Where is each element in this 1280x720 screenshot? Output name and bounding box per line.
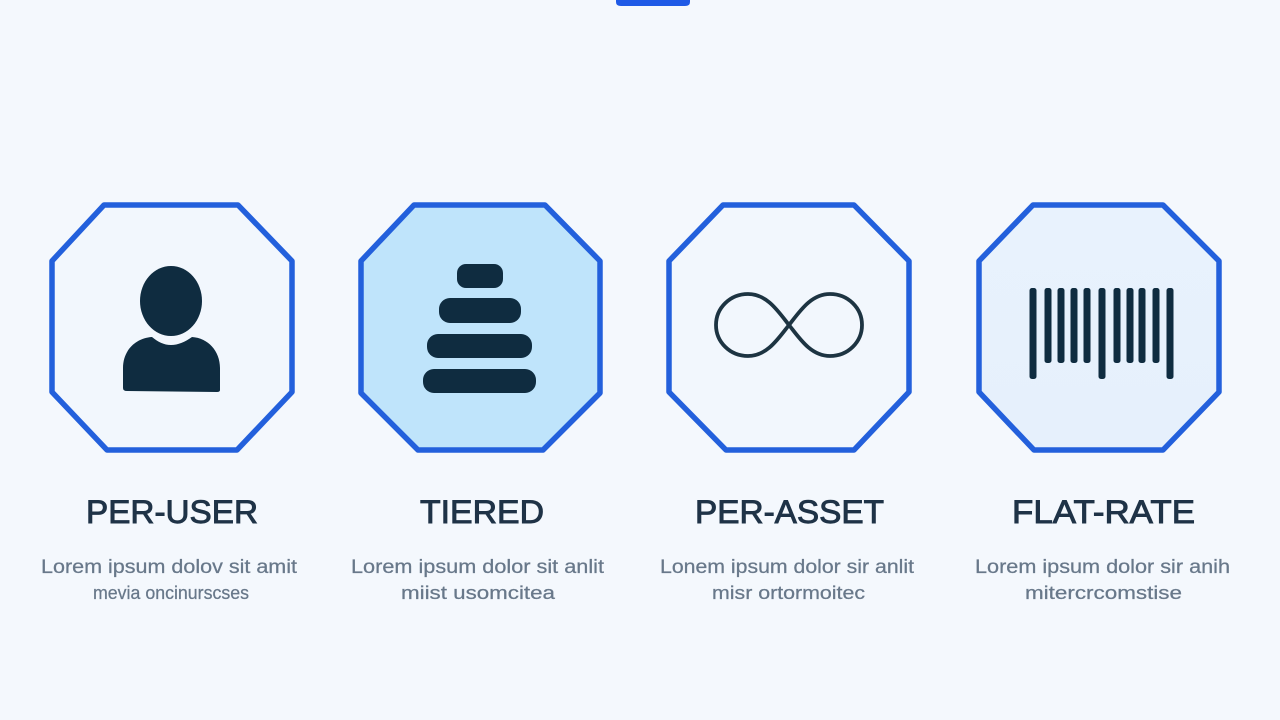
panel: tiered xyxy=(351,205,605,603)
icon: barcode xyxy=(1030,288,1174,379)
description: tiered: Lorem ipsum dolor sit anlit xyxy=(351,557,605,578)
octagon: tiered xyxy=(361,205,600,450)
heading: per-user: PER-USER xyxy=(86,494,258,530)
octagon: per-user xyxy=(52,205,292,450)
description: per-asset: misr ortormoitec xyxy=(712,582,865,603)
top accent bar xyxy=(616,0,690,6)
octagon: flat-rate xyxy=(979,205,1219,450)
description: tiered xyxy=(351,557,605,603)
octagon: per-asset xyxy=(669,205,909,450)
description: flat-rate: mitercrcomstise xyxy=(1025,582,1182,603)
heading: tiered: TIERED xyxy=(420,494,544,530)
description: flat-rate: Lorem ipsum dolor sir anih xyxy=(975,557,1230,578)
panel: flat-rate xyxy=(975,205,1230,603)
description: per-user: mevia oncinurscses xyxy=(93,582,249,603)
description: per-user: Lorem ipsum dolov sit amit xyxy=(41,557,298,578)
icon: person xyxy=(123,266,220,392)
heading: flat-rate: FLAT-RATE xyxy=(1012,494,1195,530)
panel: per-user xyxy=(41,205,298,603)
description: tiered: miist usomcitea xyxy=(401,582,556,603)
description: per-user xyxy=(41,557,298,603)
icon: stacked tiers xyxy=(423,264,536,393)
panel: per-asset xyxy=(660,205,915,603)
description: per-asset: Lonem ipsum dolor sir anlit xyxy=(660,557,915,578)
description: per-asset xyxy=(660,557,915,603)
icon: infinity xyxy=(716,294,862,356)
heading: per-asset: PER-ASSET xyxy=(695,494,884,530)
description: flat-rate xyxy=(975,557,1230,603)
